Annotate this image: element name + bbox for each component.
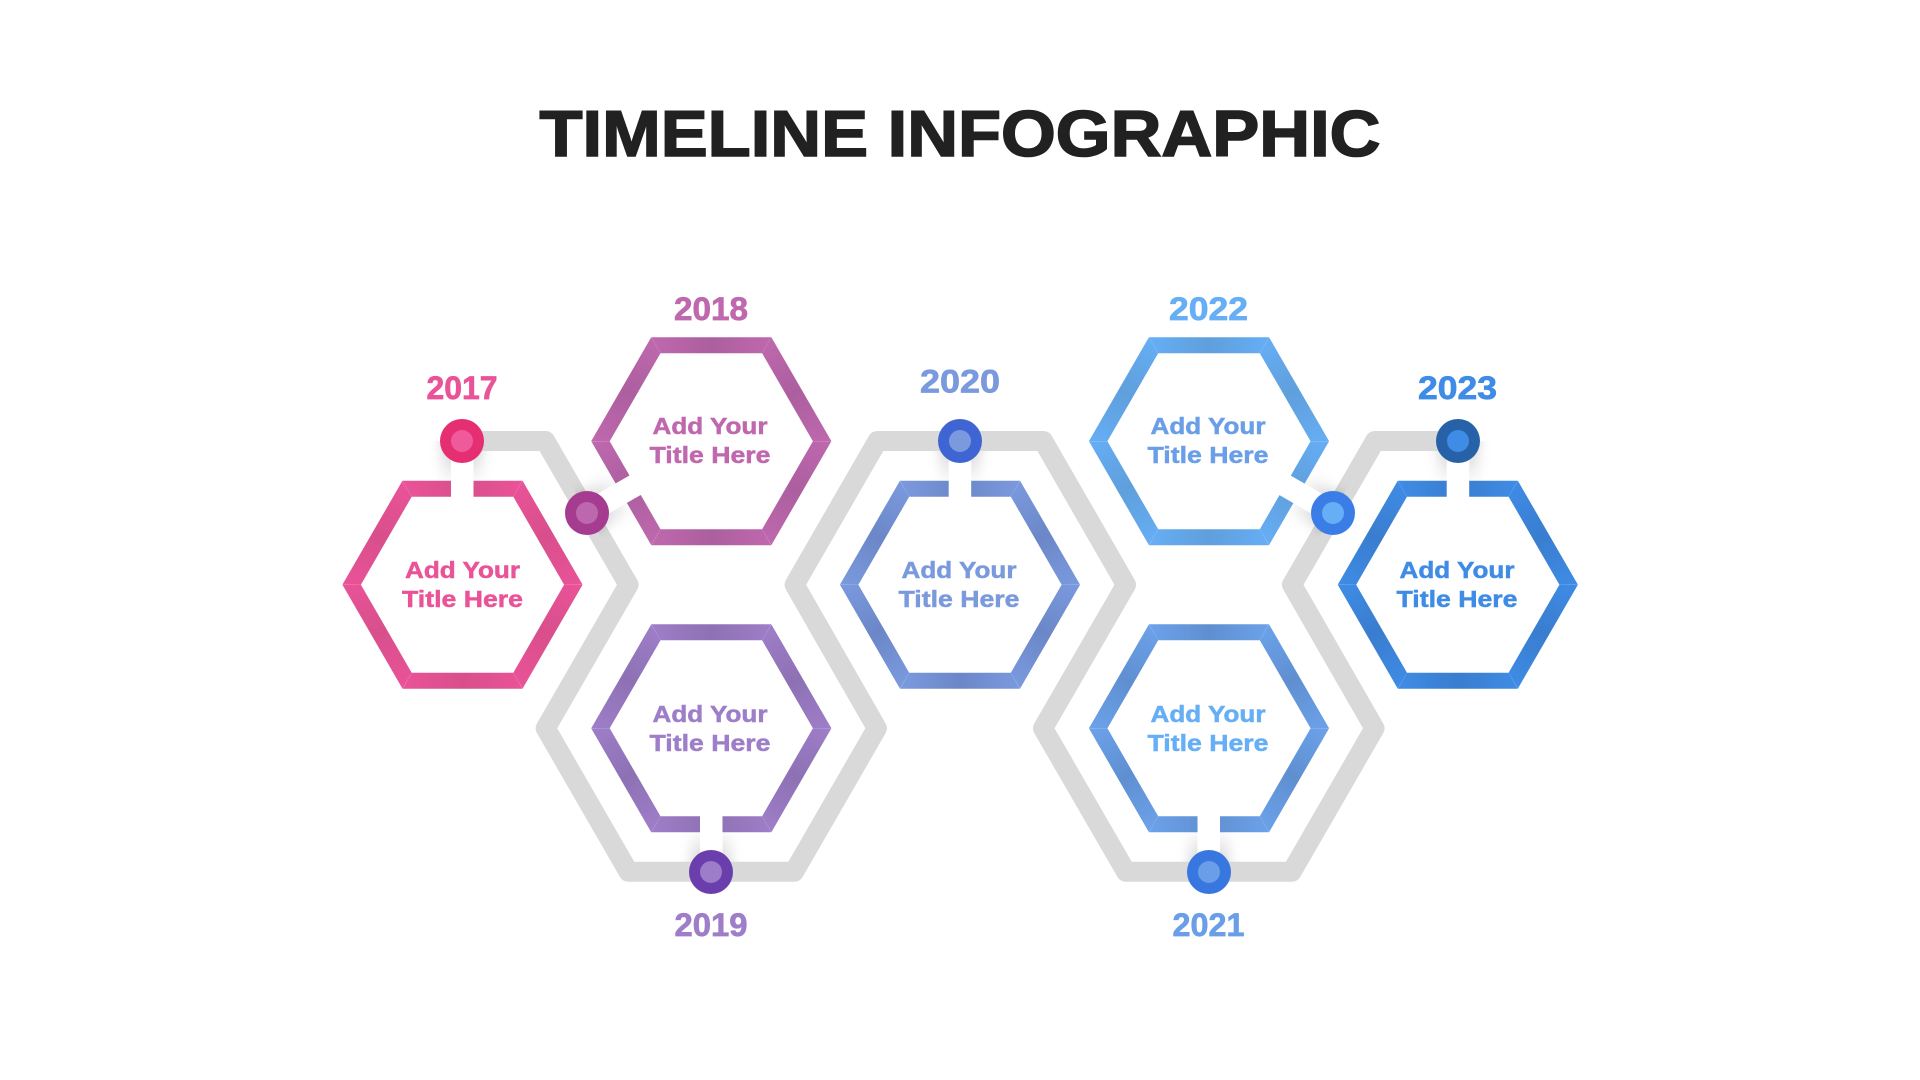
connector shadows under the timeline path [442, 441, 1478, 872]
year: 2017 [426, 370, 498, 406]
connector [1198, 814, 1220, 872]
node [565, 491, 609, 535]
label [1148, 413, 1268, 468]
label [650, 701, 770, 756]
node [1311, 491, 1355, 535]
label: Title Here [1148, 730, 1268, 756]
milestone 2023 [1338, 370, 1578, 689]
milestone 2017 [342, 370, 583, 689]
label [402, 557, 523, 612]
hexagon [1089, 624, 1329, 832]
milestone 2018 [565, 291, 831, 545]
label: Add Your [1400, 557, 1515, 583]
node [440, 419, 484, 463]
hexagon [840, 481, 1080, 689]
hexagon [591, 624, 831, 832]
connector [581, 474, 643, 523]
title: TIMELINE INFOGRAPHIC [540, 97, 1380, 170]
connector [1447, 441, 1469, 499]
label: Title Here [1148, 442, 1268, 468]
year: 2023 [1418, 370, 1497, 406]
label [898, 557, 1020, 612]
year: 2019 [674, 907, 748, 943]
connector shadow [577, 476, 632, 530]
label: Add Your [902, 557, 1017, 583]
label: Add Your [1150, 701, 1266, 727]
label [650, 413, 770, 468]
node [1187, 850, 1231, 894]
connector shadow [1288, 476, 1343, 530]
milestone 2019 [591, 624, 831, 943]
label: Title Here [402, 586, 523, 612]
hexagon [1089, 337, 1329, 545]
node [1436, 419, 1480, 463]
label: Title Here [650, 730, 770, 756]
connector [1277, 474, 1339, 523]
label: Add Your [405, 557, 520, 583]
year: 2018 [674, 291, 748, 327]
year: 2022 [1169, 291, 1248, 327]
label: Add Your [652, 701, 768, 727]
hexagon [342, 481, 583, 689]
hexagon [591, 337, 831, 545]
label: Title Here [898, 586, 1020, 612]
connector [700, 814, 722, 872]
milestone 2022 [1089, 291, 1355, 545]
milestone 2020 [840, 364, 1080, 689]
milestone 2021 [1089, 624, 1329, 943]
label: Add Your [1150, 413, 1266, 439]
connector [949, 441, 971, 499]
label [1396, 557, 1518, 612]
year: 2021 [1172, 907, 1244, 943]
label: Title Here [1396, 586, 1518, 612]
label: Add Your [652, 413, 768, 439]
label [1148, 701, 1268, 756]
timeline path [462, 441, 1458, 872]
year: 2020 [920, 364, 1000, 400]
connector [451, 441, 474, 499]
hexagon [1338, 481, 1578, 689]
label: Title Here [650, 442, 770, 468]
node [938, 419, 982, 463]
node [689, 850, 733, 894]
